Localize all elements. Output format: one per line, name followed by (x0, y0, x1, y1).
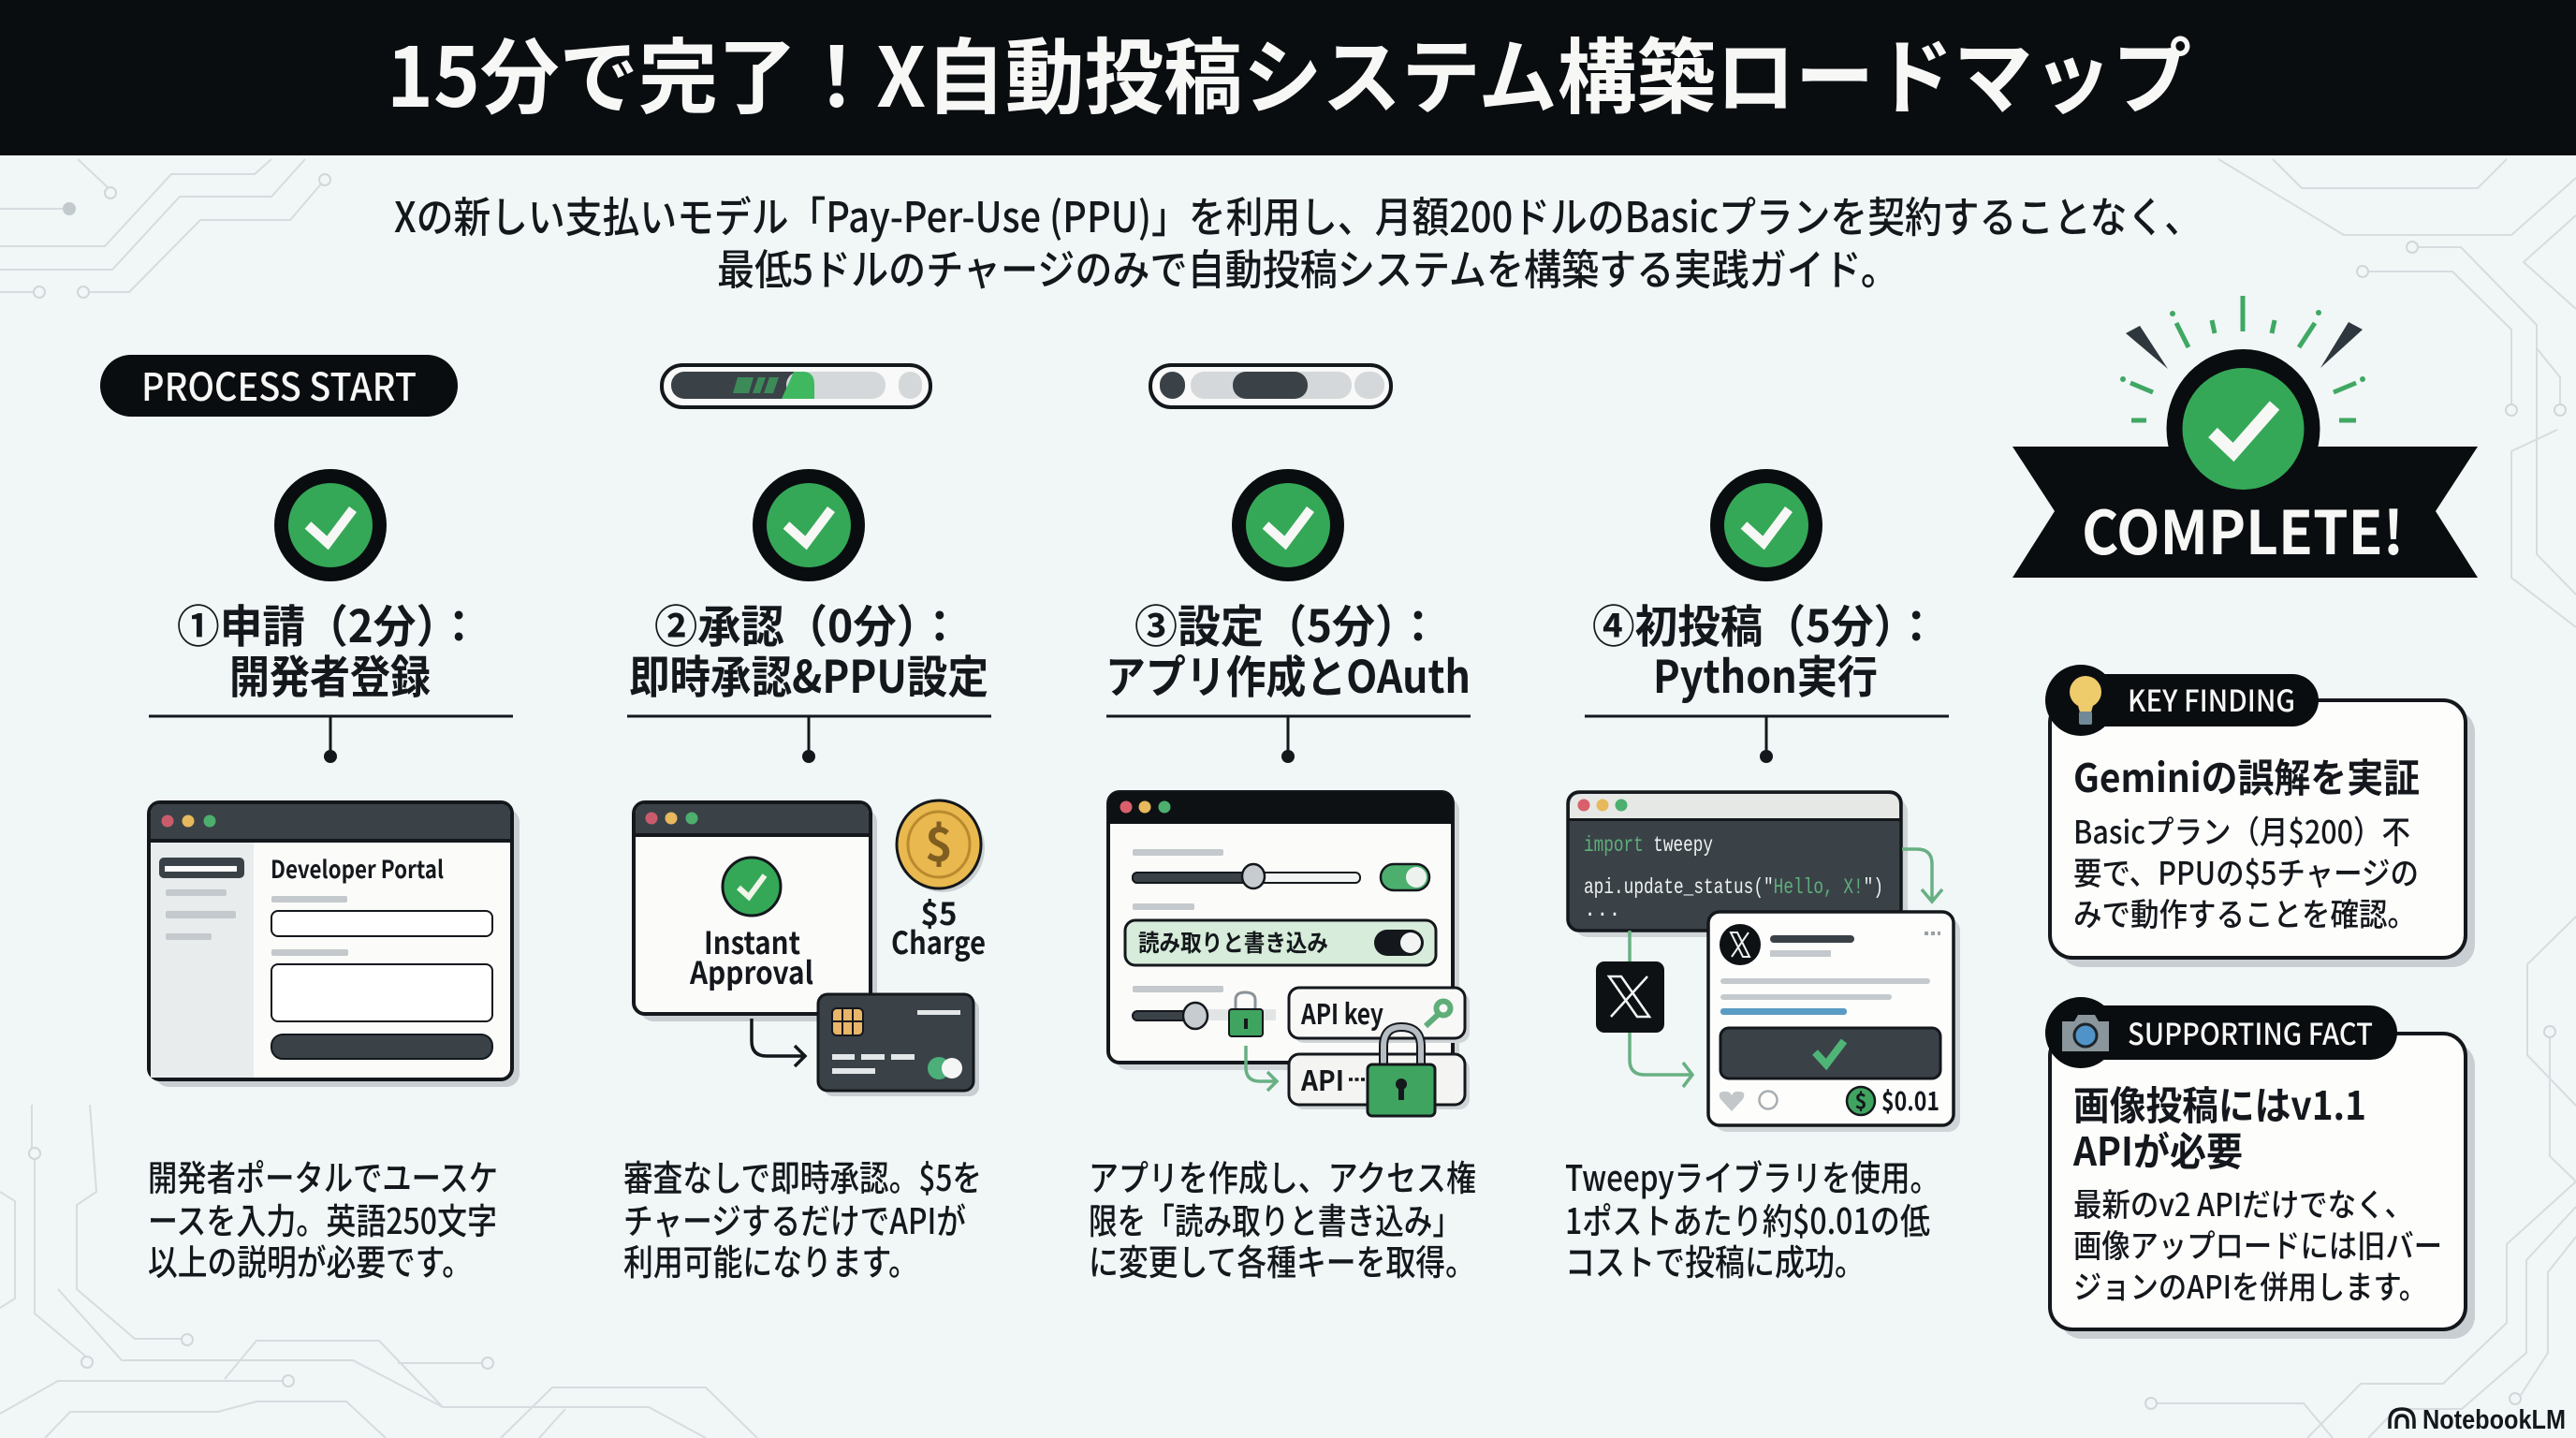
complete badge (2012, 296, 2478, 578)
step 1 description: 開発者ポータルでユースケ (148, 1150, 498, 1201)
step 1 description: 以上の説明が必要です。 (148, 1234, 472, 1285)
step 2 illustration: instant approval window, coin and card: Instant (704, 918, 800, 963)
step 4 description: コストで投稿に成功。 (1565, 1234, 1865, 1285)
step 4 illustration: code window, X tile and post card: api.update_status("Hello, X!") (1584, 875, 1883, 900)
step 1 illustration: developer portal window: Developer Portal (271, 851, 444, 886)
panel: key finding: Basicプラン（月$200）不 (2073, 807, 2410, 853)
step 1 illustration: developer portal window (147, 802, 520, 1087)
step 2 illustration: instant approval window, coin and card (632, 800, 986, 1096)
progress indicator: step 2 (662, 365, 930, 407)
panel: supporting fact: APIが必要 (2072, 1121, 2243, 1178)
key finding tag: KEY FINDING (2128, 678, 2295, 721)
step 2 illustration: instant approval window, coin and card: $5 (921, 889, 957, 934)
step 2 description: チャージするだけでAPIが (623, 1193, 966, 1244)
step 4 illustration: code window, X tile and post card (1568, 792, 1960, 1132)
step 3 description: に変更して各種キーを取得。 (1089, 1234, 1475, 1285)
step 4 description: Tweepyライブラリを使用。 (1565, 1150, 1939, 1201)
panel: key finding: みで動作することを確認。 (2073, 889, 2416, 935)
panel: supporting fact: 画像投稿にはv1.1 (2073, 1075, 2366, 1132)
step 3 check badge (1232, 469, 1344, 581)
step 4 description (1565, 1150, 1939, 1285)
process start pill: PROCESS START (141, 356, 417, 412)
intro text: Xの新しい支払いモデル「Pay-Per-Use (PPU)」を利用し、月額200ドルのBasicプランを契約することなく、 (394, 183, 2202, 244)
step 4 illustration: code window, X tile and post card: $0.01 (1881, 1081, 1939, 1118)
step 1 heading: 開発者登録 (229, 640, 431, 706)
supporting fact tag: SUPPORTING FACT (2128, 1011, 2373, 1054)
title bar: 15分で完了！X自動投稿システム構築ロードマップ (387, 12, 2191, 131)
step 3 heading (1105, 590, 1471, 706)
step 3 description: 限を「読み取りと書き込み」 (1089, 1193, 1461, 1244)
panel: supporting fact: 最新のv2 APIだけでなく、 (2073, 1180, 2413, 1225)
title bar (0, 0, 2576, 155)
panel: supporting fact: 画像アップロードには旧バー (2073, 1221, 2442, 1267)
step 2 illustration: instant approval window, coin and card: Approval (689, 948, 813, 993)
step 3 illustration: settings window and API keys: 読み取りと書き込み (1138, 925, 1328, 959)
step 4 heading (1592, 590, 1938, 706)
step 1 heading: ①申請（2分）： (177, 590, 480, 655)
step 1 heading (177, 590, 480, 706)
step 4 heading: ④初投稿（5分）： (1592, 590, 1938, 655)
step 1 description (148, 1150, 498, 1285)
step 2 heading: ②承認（0分）： (654, 590, 961, 655)
key finding tag (2045, 665, 2319, 736)
panel: supporting fact: ジョンのAPIを併用します。 (2073, 1262, 2427, 1308)
intro text: 最低5ドルのチャージのみで自動投稿システムを構築する実践ガイド。 (717, 236, 1898, 297)
intro text (394, 183, 2202, 297)
step 3 illustration: settings window and API keys: API key (1300, 991, 1383, 1033)
step 2 connector (627, 716, 991, 763)
step 3 description: アプリを作成し、アクセス権 (1089, 1150, 1476, 1201)
panel: supporting fact (2045, 997, 2475, 1339)
step 2 heading (629, 590, 988, 706)
step 3 illustration: settings window and API keys: API (1300, 1058, 1344, 1099)
step 4 check badge (1710, 469, 1822, 581)
step 2 illustration: instant approval window, coin and card: $ (925, 808, 953, 875)
supporting fact tag (2045, 997, 2397, 1068)
panel: key finding: 要で、PPUの$5チャージの (2073, 848, 2419, 894)
step 3 heading: ③設定（5分）： (1134, 590, 1440, 655)
step 1 description: ースを入力。英語250文字 (148, 1193, 497, 1244)
step 4 heading: Python実行 (1653, 640, 1878, 706)
complete badge: COMPLETE! (2082, 486, 2404, 572)
panel: key finding (2045, 665, 2475, 967)
step 4 illustration: code window, X tile and post card: import tweepy (1584, 833, 1713, 858)
step 1 connector (149, 716, 513, 763)
step 4 illustration: code window, X tile and post card: $ (1855, 1085, 1866, 1115)
step 2 illustration: instant approval window, coin and card: Charge (891, 918, 986, 963)
step 4 description: 1ポストあたり約$0.01の低 (1565, 1193, 1930, 1244)
step 3 description (1089, 1150, 1476, 1285)
step 3 connector (1106, 716, 1471, 763)
step 2 check badge (753, 469, 865, 581)
progress indicator: step 3 (1150, 365, 1391, 407)
step 2 heading: 即時承認&PPU設定 (629, 640, 988, 706)
step 2 description (623, 1150, 982, 1285)
step 1 check badge (274, 469, 387, 581)
step 2 description: 利用可能になります。 (623, 1234, 918, 1285)
step 3 heading: アプリ作成とOAuth (1105, 640, 1471, 706)
panel: key finding: Geminiの誤解を実証 (2073, 747, 2420, 804)
step 4 connector (1585, 716, 1949, 763)
step 4 illustration: code window, X tile and post card: ... (1584, 899, 1621, 922)
step 3 illustration: settings window and API keys (1108, 792, 1470, 1116)
step 2 description: 審査なしで即時承認。$5を (623, 1150, 982, 1201)
